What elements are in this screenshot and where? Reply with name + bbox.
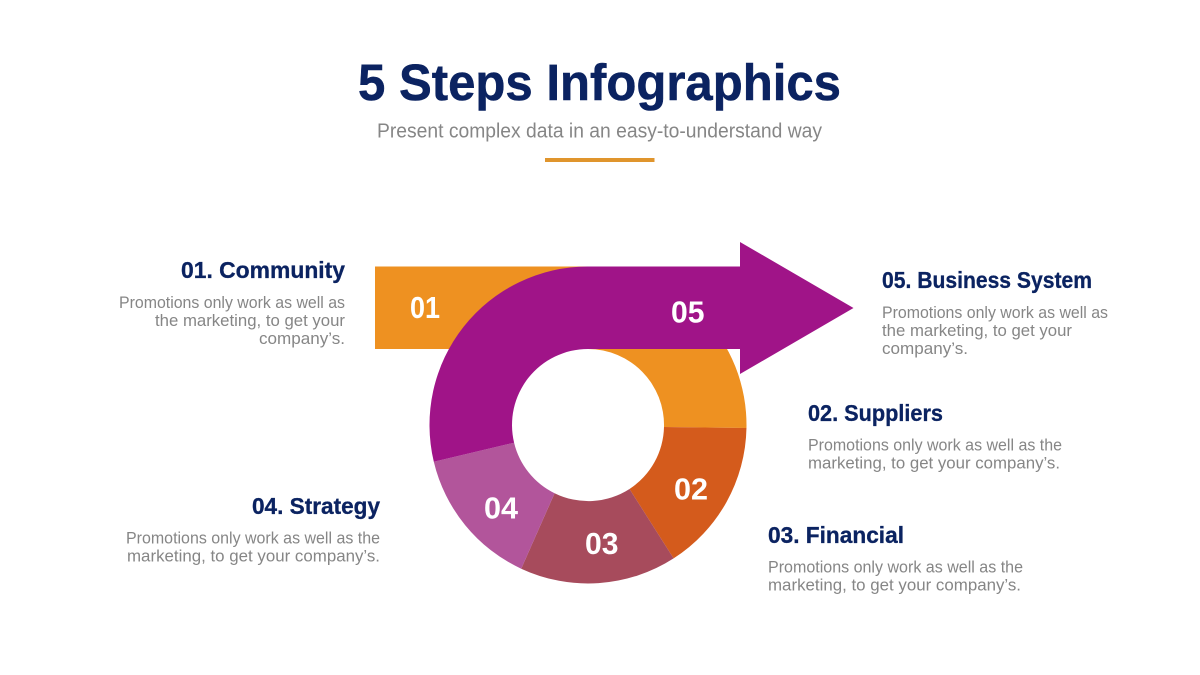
text block: 02 Suppliers: marketing, to get your company’s.: [808, 454, 1060, 472]
text block: 01 Community: [119, 257, 346, 348]
number 01: 01: [410, 290, 440, 325]
ring segment: step 02: [630, 427, 746, 558]
text block: 03 Financial: 03. Financial: [768, 522, 904, 548]
number 04: 04: [484, 490, 519, 526]
ring segment: step 04: [434, 443, 555, 569]
number 03: 03: [585, 526, 618, 561]
step 01 orange band: [375, 266, 595, 349]
text block: 03 Financial: [768, 522, 1023, 594]
step 05 curved arrow: [429, 242, 854, 462]
text block: 05 Business System: the marketing, to get your: [882, 322, 1073, 340]
text block: 02 Suppliers: 02. Suppliers: [808, 400, 943, 426]
text block: 05 Business System: 05. Business System: [882, 267, 1092, 293]
ring segment: step 03: [521, 489, 674, 583]
text block: 04 Strategy: marketing, to get your company’s.: [127, 548, 380, 566]
text block: 05 Business System: [882, 267, 1108, 358]
number 05: 05: [671, 294, 704, 330]
text block: 03 Financial: marketing, to get your company’s.: [768, 576, 1021, 594]
ring segment: step 02 upper orange: [588, 266, 746, 428]
text block: 03 Financial: Promotions only work as well as the: [768, 558, 1023, 576]
text block: 04 Strategy: [126, 493, 380, 566]
text block: 04 Strategy: 04. Strategy: [252, 493, 380, 519]
text block: 01 Community: Promotions only work as well as: [119, 294, 345, 312]
text block: 02 Suppliers: [808, 400, 1062, 472]
text block: 05 Business System: Promotions only work as well as: [882, 304, 1108, 322]
text block: 05 Business System: company’s.: [882, 340, 968, 358]
text block: 01 Community: 01. Community: [181, 257, 345, 283]
number 02: 02: [674, 472, 708, 506]
text block: 02 Suppliers: Promotions only work as well as the: [808, 436, 1062, 454]
text block: 01 Community: the marketing, to get your: [155, 312, 346, 330]
text block: 01 Community: company’s.: [259, 330, 345, 348]
subtitle: Present complex data in an easy-to-understand way: [377, 120, 822, 142]
text block: 04 Strategy: Promotions only work as well as the: [126, 530, 380, 548]
title: 5 Steps Infographics: [358, 54, 841, 111]
title accent rule: [545, 158, 654, 162]
